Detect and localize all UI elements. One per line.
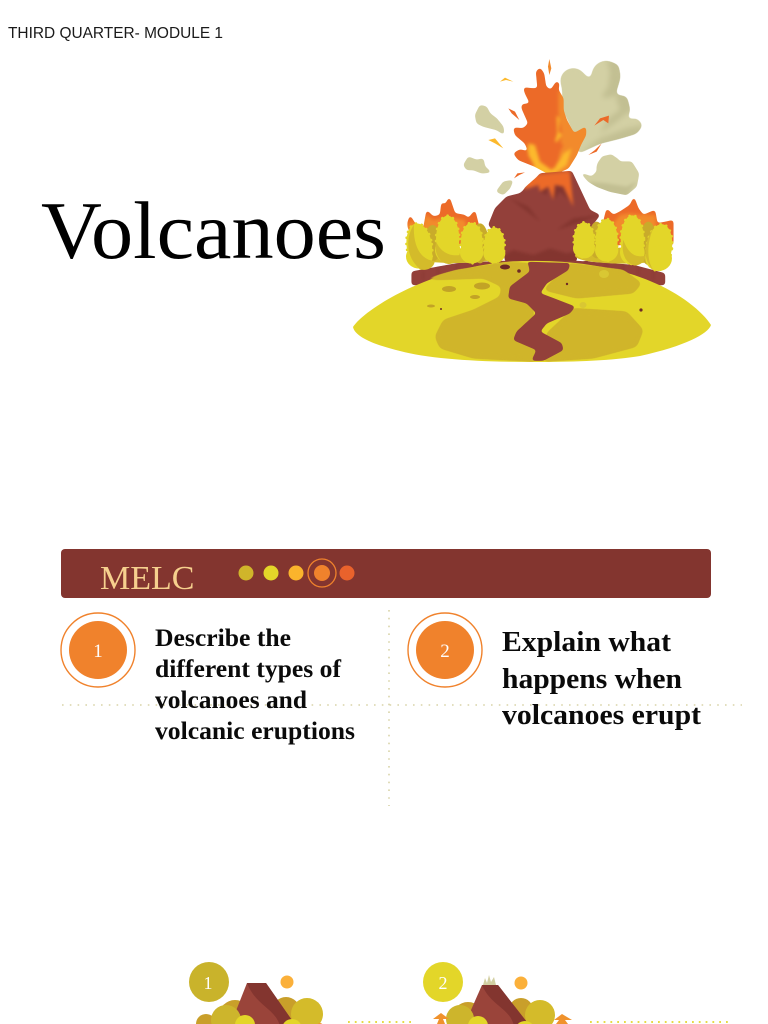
objective 2 text: Explain what [502,626,671,658]
step 1 volcano icon: 1 [204,973,212,993]
lava river [508,262,575,361]
objective 1 text: volcanic eruptions [155,718,355,745]
objective 1 text: volcanoes and [155,687,307,714]
lava plume [513,68,586,176]
illustration: erupting volcano [353,59,711,362]
MELC heading: MELC [100,560,194,597]
objective 2 text: happens when [502,663,682,695]
ground shading [418,262,643,362]
step 1 volcano icon [189,962,323,1024]
ground details [427,264,643,312]
left bushes [404,216,505,270]
objective 1 badge: 1 [93,641,103,662]
right bushes [573,215,675,272]
title: Volcanoes [41,185,386,276]
rim behind ground [412,258,665,285]
objective 1 text: Describe the [155,625,291,652]
objective 1 text [155,625,355,745]
objective 1 badge [61,613,135,687]
objective 2 badge [408,613,482,687]
fire bands [407,197,673,245]
connector dots [348,1021,416,1023]
MELC banner [61,549,711,598]
volcano cone [488,171,600,262]
big smoke cloud [561,61,643,153]
objective 2 text: volcanoes erupt [502,699,701,731]
objective 2 text [502,626,701,731]
connector dots right [590,1021,732,1023]
banner dots [238,559,354,587]
step 2 volcano icon [423,962,572,1024]
objective 2 badge: 2 [440,641,450,662]
lava sparks [488,59,609,178]
ground [353,261,711,362]
module label: THIRD QUARTER- MODULE 1 [8,25,223,42]
small smoke puffs [463,105,639,195]
step 2 volcano icon: 2 [438,973,448,993]
objective 1 text: different types of [155,656,342,683]
